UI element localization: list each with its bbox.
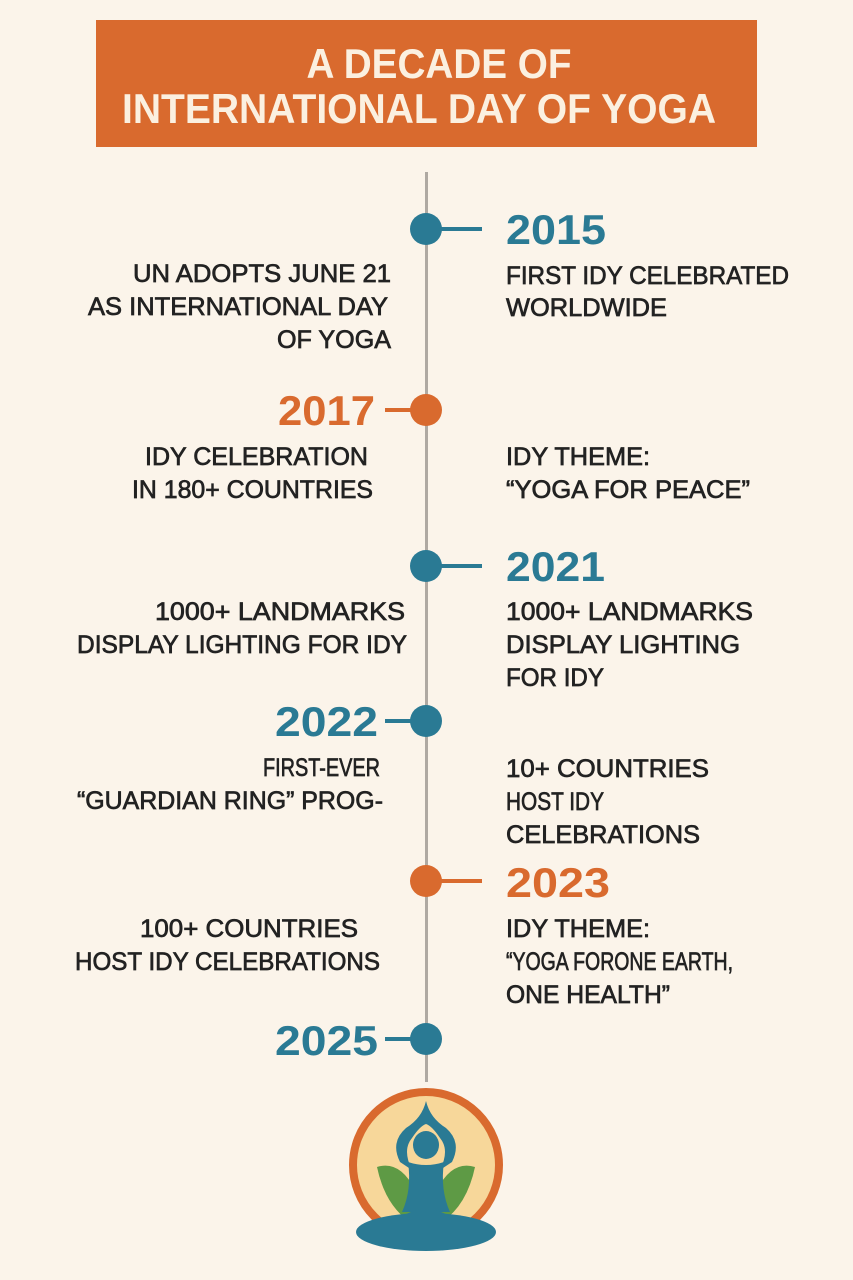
- entry 2023: “YOGA FORONE EARTH,: [506, 948, 733, 976]
- entry 2022: FIRST-EVER: [263, 754, 380, 782]
- entry 2021: FOR IDY: [506, 664, 604, 692]
- title banner: A DECADE OF: [306, 40, 572, 87]
- entry 2021: 1000+ LANDMARKS: [155, 598, 405, 626]
- entry 2015: WORLDWIDE: [506, 294, 667, 322]
- title banner: [96, 20, 757, 147]
- entry 2022: HOST IDY: [506, 788, 604, 816]
- entry 2017: “YOGA FOR PEACE”: [506, 476, 750, 504]
- entry 2015: 2015: [506, 206, 606, 253]
- entry 2025: [275, 1017, 442, 1064]
- entry 2022: [77, 698, 709, 849]
- entry 2023: IDY THEME:: [506, 915, 650, 943]
- entry 2023: [75, 859, 733, 1009]
- entry 2022: 2022: [275, 698, 378, 745]
- entry 2015: UN ADOPTS JUNE 21: [133, 260, 391, 288]
- entry 2021: 2021: [506, 543, 605, 590]
- entry 2017: [132, 387, 750, 504]
- entry 2015: [88, 206, 789, 354]
- entry 2023: 2023: [506, 859, 610, 906]
- entry 2022: CELEBRATIONS: [506, 821, 700, 849]
- entry 2015: AS INTERNATIONAL DAY: [88, 293, 388, 321]
- title banner: INTERNATIONAL DAY OF YOGA: [122, 85, 716, 132]
- entry 2021: 1000+ LANDMARKS: [506, 598, 753, 626]
- entry 2015: FIRST IDY CELEBRATED: [506, 262, 789, 290]
- entry 2021: [77, 543, 753, 692]
- icon: yoga logo: [353, 1092, 499, 1251]
- entry 2023: ONE HEALTH”: [506, 981, 670, 1009]
- timeline line: [425, 172, 428, 1082]
- entry 2021: DISPLAY LIGHTING: [506, 631, 740, 659]
- entry 2023: 100+ COUNTRIES: [140, 915, 358, 943]
- entry 2017: IN 180+ COUNTRIES: [132, 476, 373, 504]
- entry 2015: OF YOGA: [277, 326, 391, 354]
- entry 2022: 10+ COUNTRIES: [506, 755, 709, 783]
- entry 2017: IDY CELEBRATION: [145, 443, 368, 471]
- entry 2021: DISPLAY LIGHTING FOR IDY: [77, 631, 407, 659]
- entry 2025: 2025: [275, 1017, 378, 1064]
- entry 2017: 2017: [278, 387, 375, 434]
- entry 2017: IDY THEME:: [506, 443, 650, 471]
- entry 2022: “GUARDIAN RING” PROG-: [77, 787, 383, 815]
- entry 2023: HOST IDY CELEBRATIONS: [75, 948, 380, 976]
